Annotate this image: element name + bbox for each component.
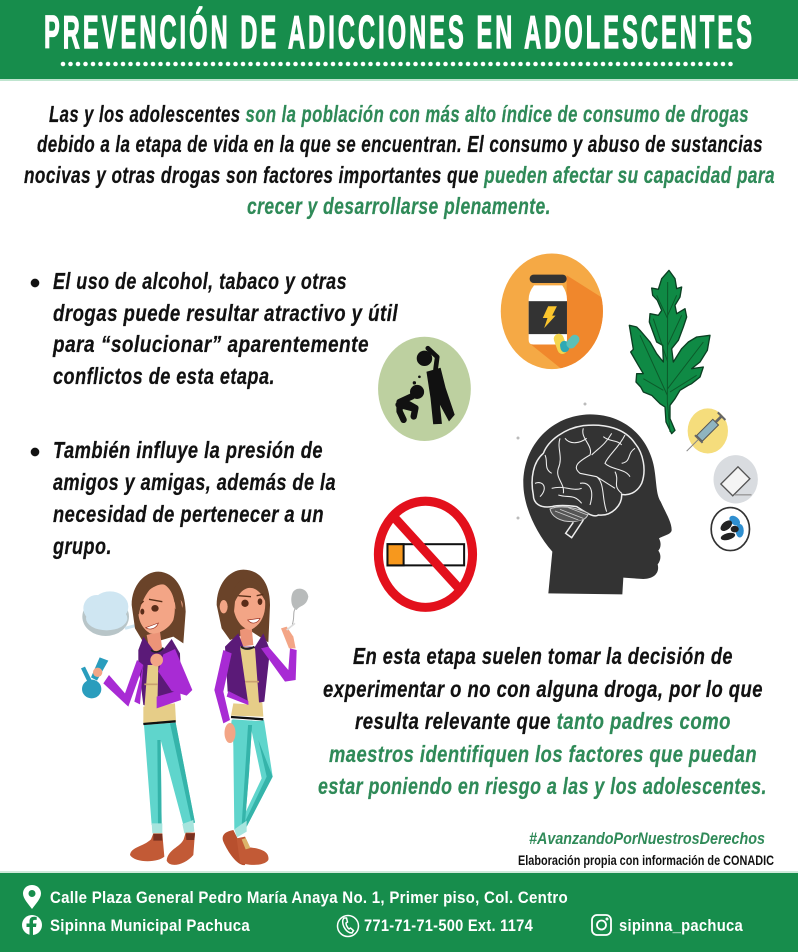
bullet: alcohol, tabaco y drogas: drogas puede resultar atractivo y útil	[53, 300, 398, 326]
icon: instagram	[592, 915, 611, 935]
header banner	[0, 0, 798, 81]
phone number: 771-71-71-500 Ext. 1174	[364, 916, 533, 935]
facebook name: Sipinna Municipal Pachuca	[50, 916, 250, 935]
illustration: two teenage girls	[81, 570, 308, 865]
bullet: alcohol, tabaco y drogas: El uso de alcohol, tabaco y otras	[53, 268, 347, 294]
closing paragraph: resulta relevante que tanto padres como	[355, 708, 731, 734]
bullet: alcohol, tabaco y drogas: conflictos de esta etapa.	[53, 363, 275, 389]
footer	[0, 871, 798, 952]
address: Calle Plaza General Pedro María Anaya No. 1, Primer piso, Col. Centro	[50, 888, 568, 907]
boots	[130, 820, 195, 865]
bullet: alcohol, tabaco y drogas: para “solucionar” aparentemente	[52, 331, 369, 357]
bullet: presión de amigos: amigos y amigas, además de la	[53, 469, 336, 495]
icon: grey card	[714, 455, 758, 504]
bullet: presión de amigos: necesidad de pertenecer a un	[53, 501, 324, 527]
intro paragraph: crecer y desarrollarse plenamente.	[247, 193, 551, 219]
instagram handle: sipinna_pachuca	[619, 916, 743, 935]
bullet: presión de amigos: grupo.	[52, 533, 112, 559]
girl with cigarette	[214, 570, 308, 865]
icon: hemp leaf	[629, 270, 710, 434]
icon: child and parent silhouette	[378, 337, 471, 441]
boots	[223, 821, 268, 865]
left hand	[224, 723, 236, 743]
icon: supplement bottle	[500, 254, 603, 370]
closing paragraph	[318, 643, 767, 799]
icon: phone	[338, 916, 358, 936]
icon cluster	[378, 253, 758, 607]
bullet: alcohol, tabaco y drogas	[31, 268, 398, 389]
intro paragraph	[24, 101, 775, 219]
upper body and head	[214, 570, 308, 725]
upper body and head	[81, 572, 192, 722]
icon: head with brain	[523, 414, 672, 594]
bullet: presión de amigos: También influye la presión de	[53, 437, 323, 463]
bullet: presión de amigos	[31, 437, 336, 559]
icon: facebook	[22, 915, 42, 936]
legs	[232, 719, 273, 830]
legs	[143, 703, 195, 825]
icon: no smoking sign	[378, 501, 473, 607]
icon: syringe	[683, 408, 728, 455]
icon: location pin	[23, 885, 41, 909]
girl with bong and vapor cloud	[81, 572, 195, 865]
icon: blue pills	[711, 508, 749, 551]
